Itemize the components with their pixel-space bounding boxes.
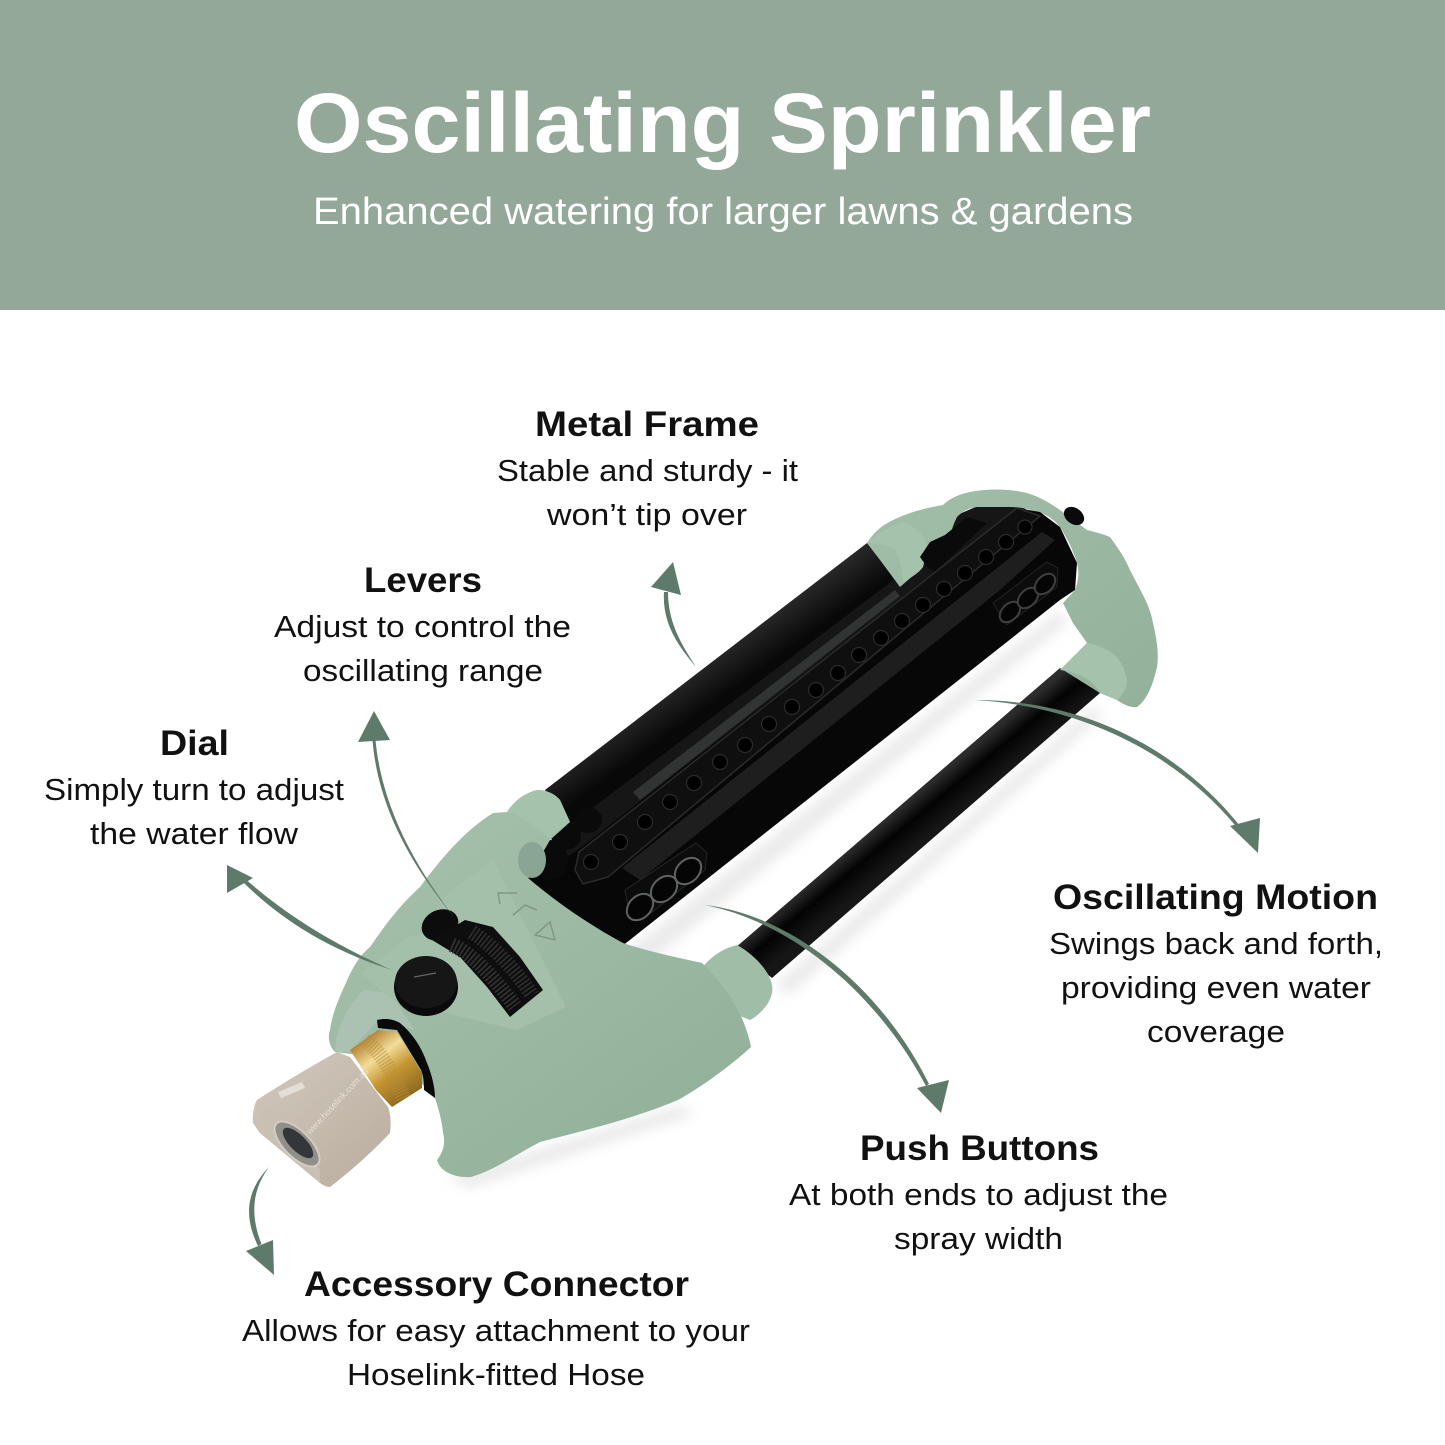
callout: accessory connector: Accessory Connector (304, 1265, 689, 1304)
push button near (622, 843, 707, 925)
callout: accessory connector: Hoselink-fitted Hose (347, 1357, 645, 1392)
push button far (993, 562, 1059, 626)
callout: oscillating motion: providing even water (1061, 970, 1371, 1005)
callout: levers (274, 561, 571, 688)
callout: levers: oscillating range (303, 653, 543, 688)
arrow: push buttons (705, 905, 949, 1113)
connector lettering: www.hoselink.com.au (303, 1066, 370, 1137)
title: Oscillating Sprinkler (294, 76, 1151, 170)
callout: oscillating motion (1049, 878, 1383, 1049)
nozzle plate (575, 508, 1040, 884)
callout: metal frame: Metal Frame (535, 405, 759, 444)
arrow: levers (358, 711, 454, 917)
callout: levers: Adjust to control the (274, 609, 571, 644)
callout: dial: Simply turn to adjust (44, 772, 344, 807)
lever top lobe (416, 903, 464, 947)
recess around hose inlet (335, 990, 415, 1052)
callout: accessory connector (242, 1265, 750, 1392)
sprinkler product illustration (253, 489, 1158, 1188)
lever thumbwheel (416, 903, 543, 1017)
callout: dial (44, 724, 344, 851)
dial knob (394, 956, 458, 1016)
callout: dial: the water flow (90, 816, 299, 851)
arrow marks on body (498, 893, 555, 940)
main green body (329, 790, 751, 1177)
beige connector body (253, 1052, 391, 1187)
lower rail tube (735, 668, 1100, 978)
bar side sheen band (622, 532, 1055, 880)
callout: metal frame (497, 405, 798, 532)
arrow: oscillating motion (975, 700, 1260, 853)
header banner (0, 0, 1445, 310)
callout: oscillating motion: Oscillating Motion (1053, 878, 1378, 917)
callout: push buttons (789, 1129, 1168, 1256)
near collar on lower rail (700, 945, 772, 1020)
black seat ring (377, 1019, 435, 1098)
nozzle row (584, 520, 1032, 870)
arrow: accessory connector (246, 1167, 274, 1275)
far end arch (867, 489, 1158, 707)
raised control plate (361, 860, 566, 1030)
collar notch shade (518, 842, 546, 878)
callout: push buttons: At both ends to adjust the (789, 1177, 1168, 1212)
white grip mark (278, 1082, 305, 1098)
callout: push buttons: Push Buttons (860, 1129, 1099, 1168)
callout: oscillating motion: Swings back and forth, (1049, 926, 1383, 961)
subtitle: Enhanced watering for larger lawns & gardens (313, 191, 1133, 233)
far upper collar (867, 522, 926, 582)
near end lever studs (532, 807, 602, 880)
upper rail tube (545, 543, 900, 830)
hose fitting (253, 1019, 435, 1187)
arrow: metal frame (651, 562, 696, 667)
soft ground shadow (445, 610, 1103, 1188)
arrow: dial (227, 865, 392, 970)
oscillating bar (528, 508, 1077, 950)
callout: dial: Dial (160, 724, 229, 763)
far end levers (920, 503, 1088, 572)
connector end notch (253, 1108, 320, 1183)
callout: oscillating motion: coverage (1147, 1014, 1285, 1049)
rail to bar backing (545, 505, 1040, 858)
far lower collar (1060, 643, 1127, 700)
collar upper highlight (507, 790, 570, 838)
brass nut (350, 1030, 422, 1107)
connector bore (267, 1114, 327, 1174)
callout: metal frame: won’t tip over (546, 497, 747, 532)
callout: accessory connector: Allows for easy attachment to your (242, 1313, 750, 1348)
sheen strip (633, 590, 900, 800)
callout: push buttons: spray width (894, 1221, 1063, 1256)
callout: levers: Levers (364, 561, 482, 600)
callout: metal frame: Stable and sturdy - it (497, 453, 798, 488)
